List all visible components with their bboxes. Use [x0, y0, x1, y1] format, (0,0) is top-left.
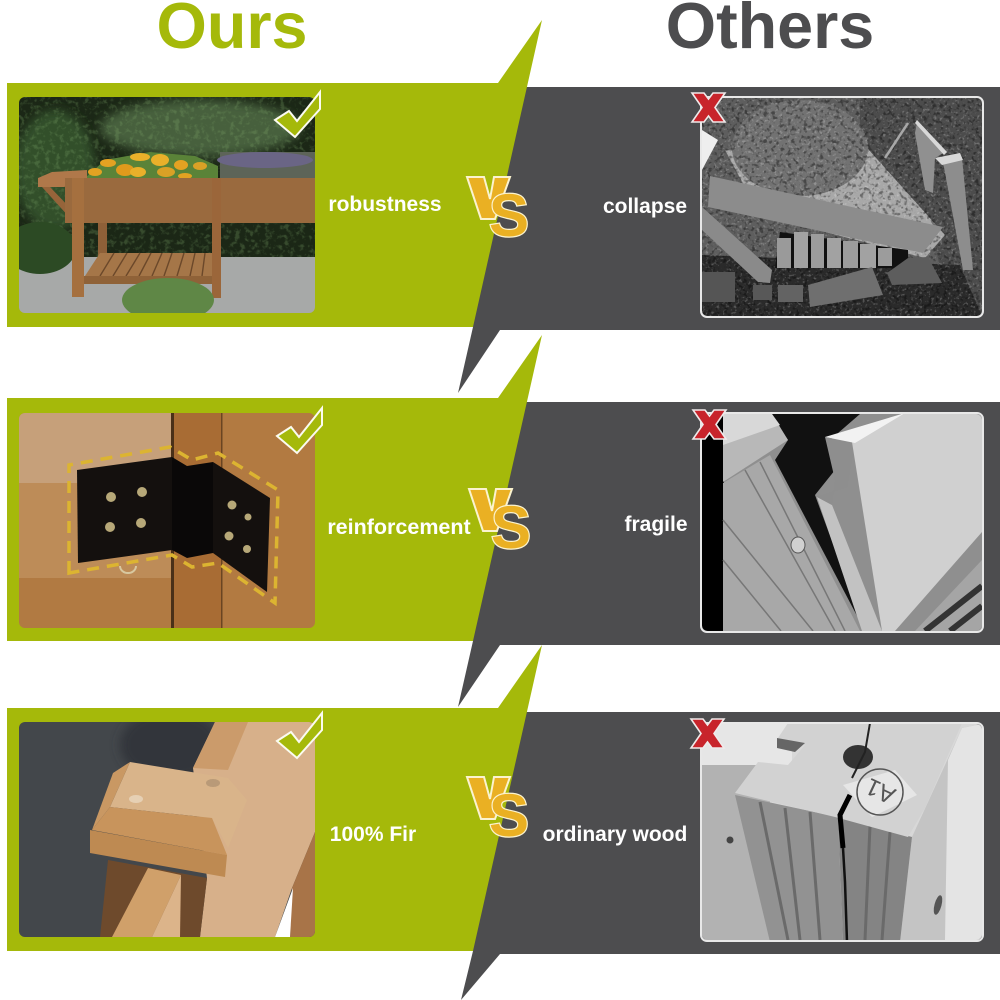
icon: VS badge [467, 177, 529, 249]
panel: others row 2 [458, 402, 1000, 707]
label: fragile: fragile [624, 513, 688, 536]
panel: ours row 2 [7, 335, 542, 641]
photo: metal bracket [19, 413, 315, 628]
photo: broken wood [702, 413, 982, 631]
label: 100% Fir: 100% Fir [330, 823, 416, 846]
icon: VS badge [469, 489, 531, 561]
photo: raised garden bed [4, 97, 315, 322]
label: reinforcement: reinforcement [327, 515, 471, 539]
photo: cracked post [702, 723, 982, 942]
icon: red X [692, 93, 725, 122]
label: collapse: collapse [603, 195, 687, 218]
photo: collapsed planter [702, 98, 982, 316]
photo: cracked post: A1 [862, 772, 900, 809]
icon: green check [277, 408, 322, 453]
icon: green check [277, 713, 322, 758]
label: robustness: robustness [328, 193, 442, 216]
panel: ours row 3 [7, 645, 542, 951]
photo: fir wood post [19, 710, 315, 937]
panel: ours row 1 [4, 20, 542, 327]
panel: others row 3 [461, 712, 1000, 1000]
icon: red X [691, 719, 724, 748]
label: ordinary wood: ordinary wood [543, 823, 687, 846]
icon: VS badge [467, 777, 529, 849]
panel: others row 1 [458, 87, 1000, 393]
icon: green check [275, 92, 320, 137]
icon: red X [693, 410, 726, 439]
